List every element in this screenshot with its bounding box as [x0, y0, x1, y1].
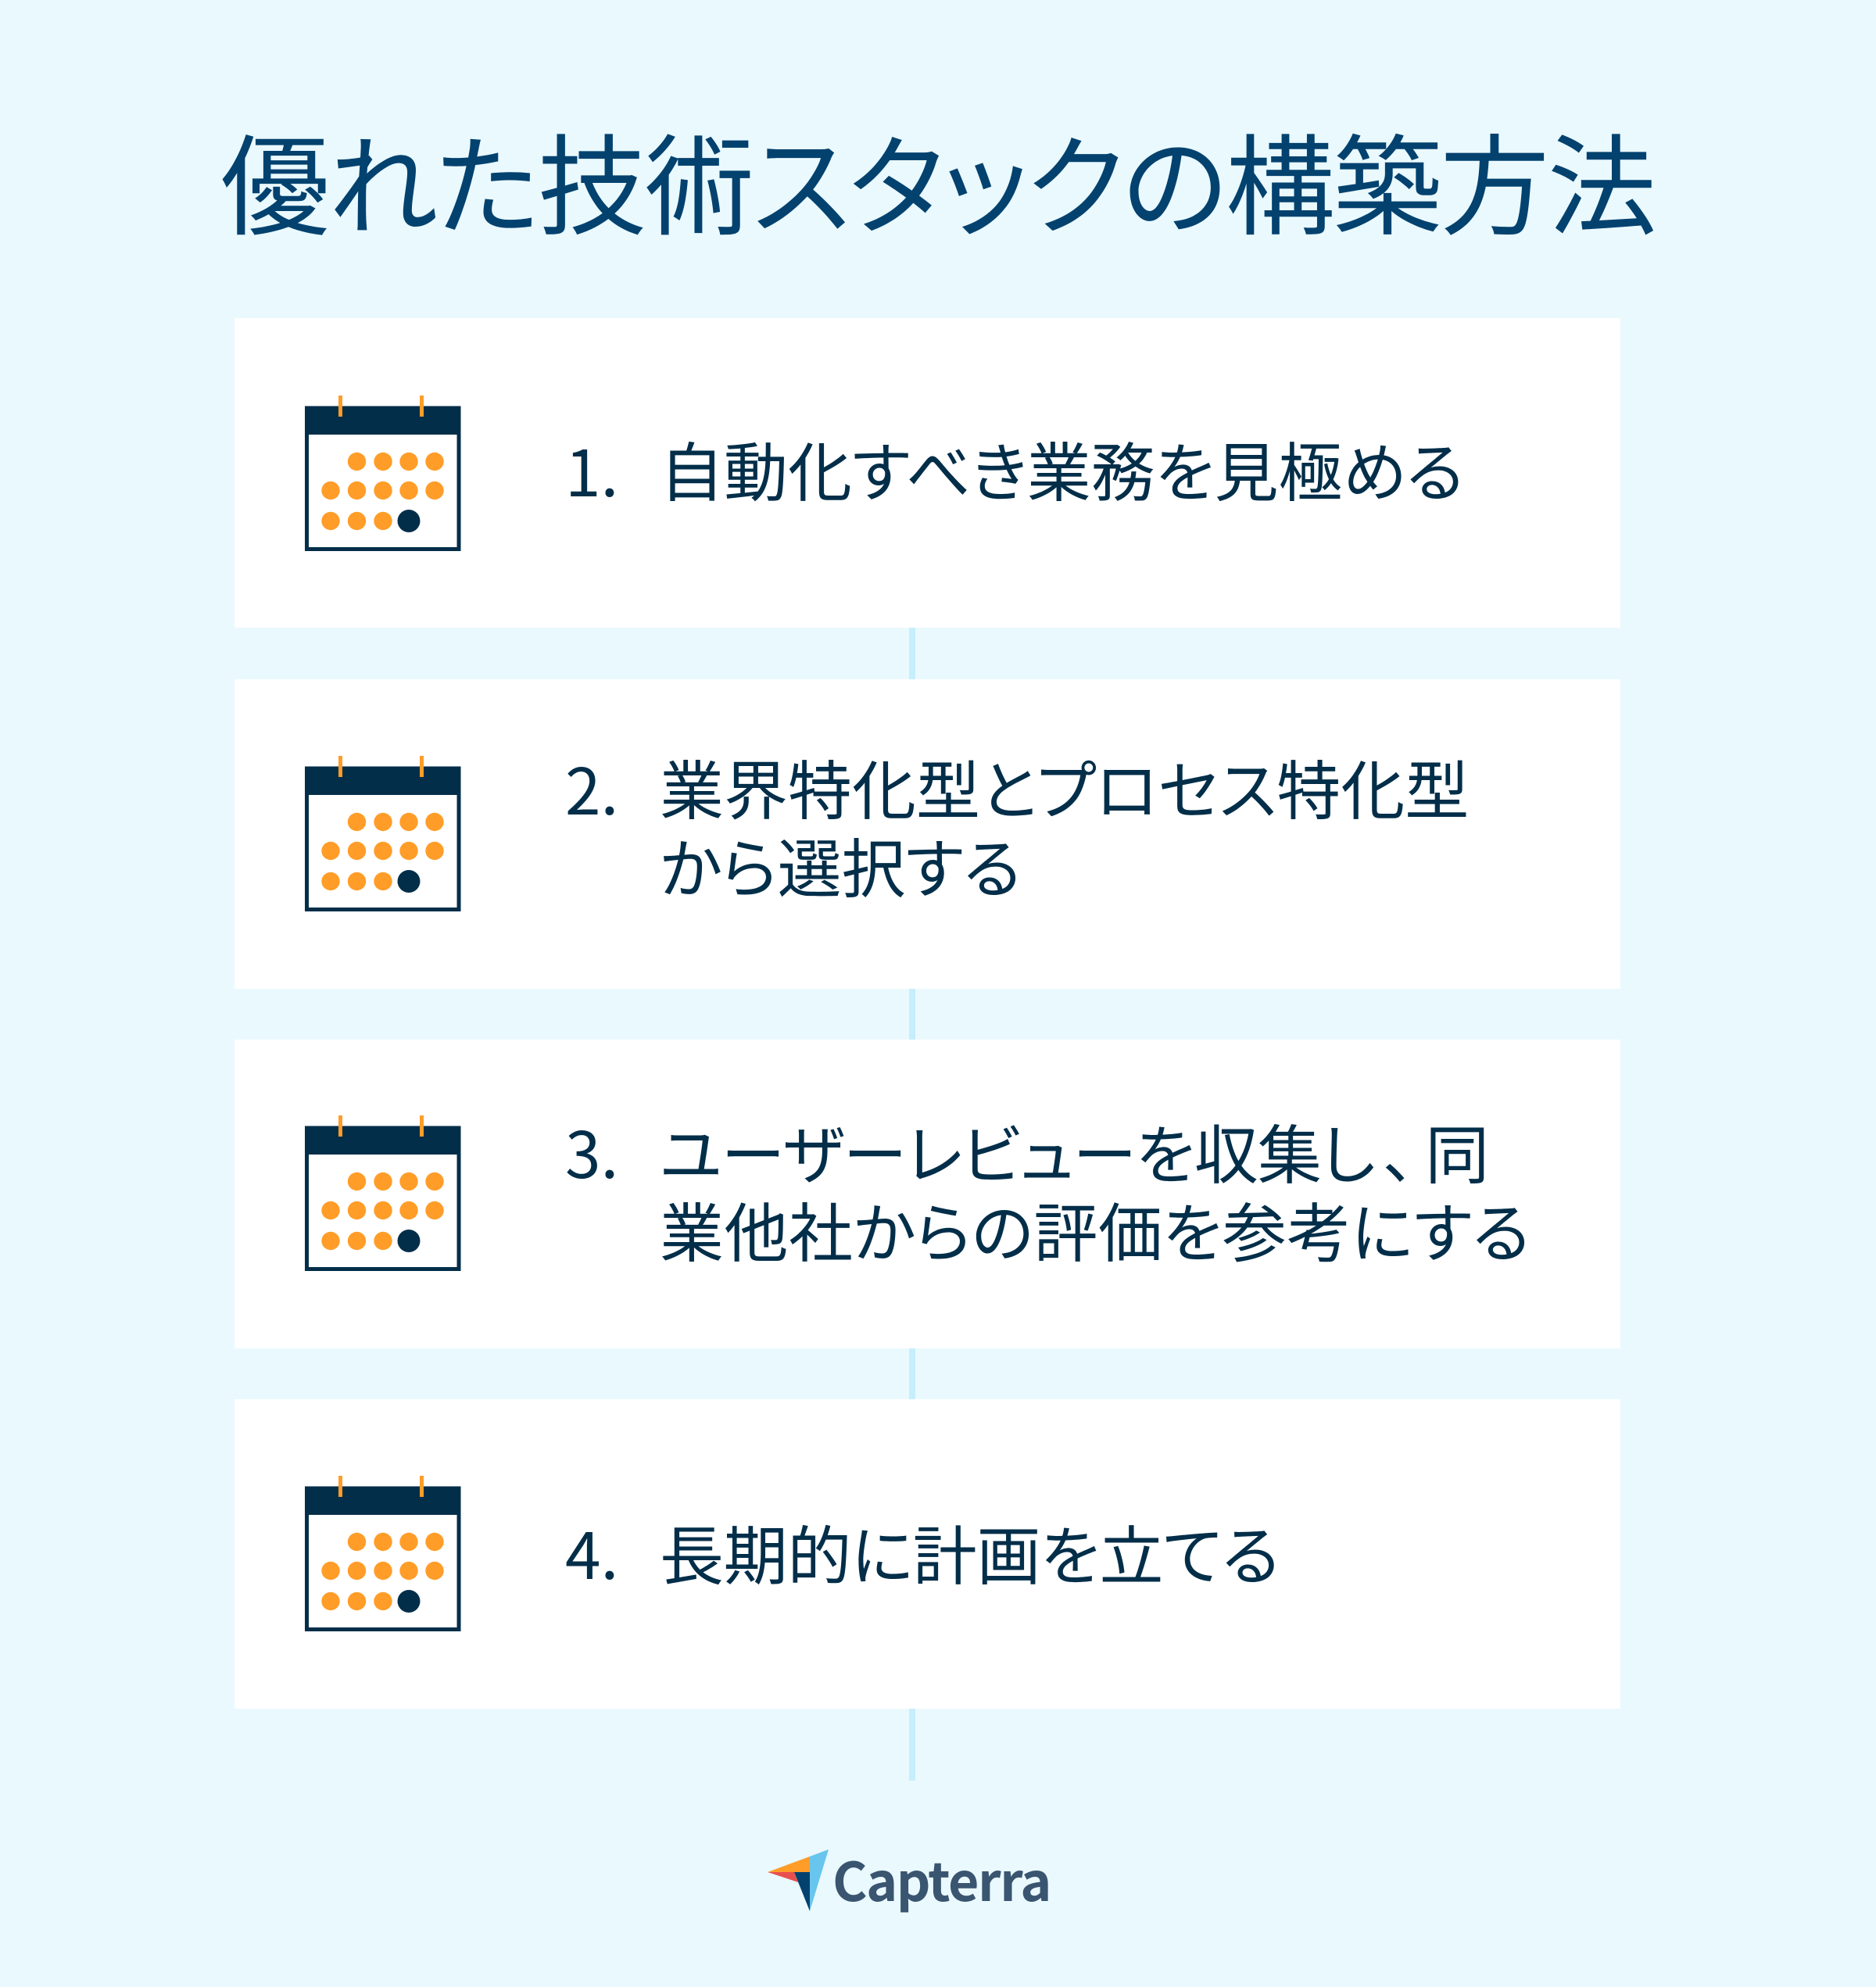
connector 2 [909, 989, 915, 1040]
icon: Capterra arrow [768, 1849, 829, 1911]
step text: 自動化すべき業務を見極める [660, 421, 1464, 514]
panel: step 1 [234, 318, 1620, 628]
logo: Capterra [768, 1839, 1051, 1917]
step text [660, 739, 1469, 911]
connector 1 [909, 628, 915, 679]
icon: calendar [305, 1476, 461, 1631]
connector 4 [909, 1709, 915, 1781]
title: 優れた技術スタックの構築方法 [220, 100, 1655, 258]
step number: 1. [565, 422, 618, 515]
step text: 業界特化型とプロセス特化型 [660, 739, 1469, 832]
icon: calendar [305, 396, 461, 551]
step text: 業他社からの評価を参考にする [660, 1182, 1531, 1275]
wordmark: Capterra [832, 1839, 1051, 1917]
step number: 2. [565, 740, 618, 833]
step text: ユーザーレビューを収集し、同 [660, 1104, 1489, 1197]
icon: calendar [305, 1115, 461, 1271]
panel: step 2 [234, 679, 1620, 989]
panel: step 4 [234, 1399, 1620, 1709]
step number: 4. [565, 1505, 618, 1598]
connector 3 [909, 1348, 915, 1399]
step number: 3. [565, 1104, 618, 1197]
icon: calendar [305, 756, 461, 911]
step text [660, 1104, 1531, 1275]
step text: から選択する [660, 818, 1021, 911]
panel: step 3 [234, 1040, 1620, 1348]
step text: 長期的に計画を立てる [660, 1505, 1280, 1598]
